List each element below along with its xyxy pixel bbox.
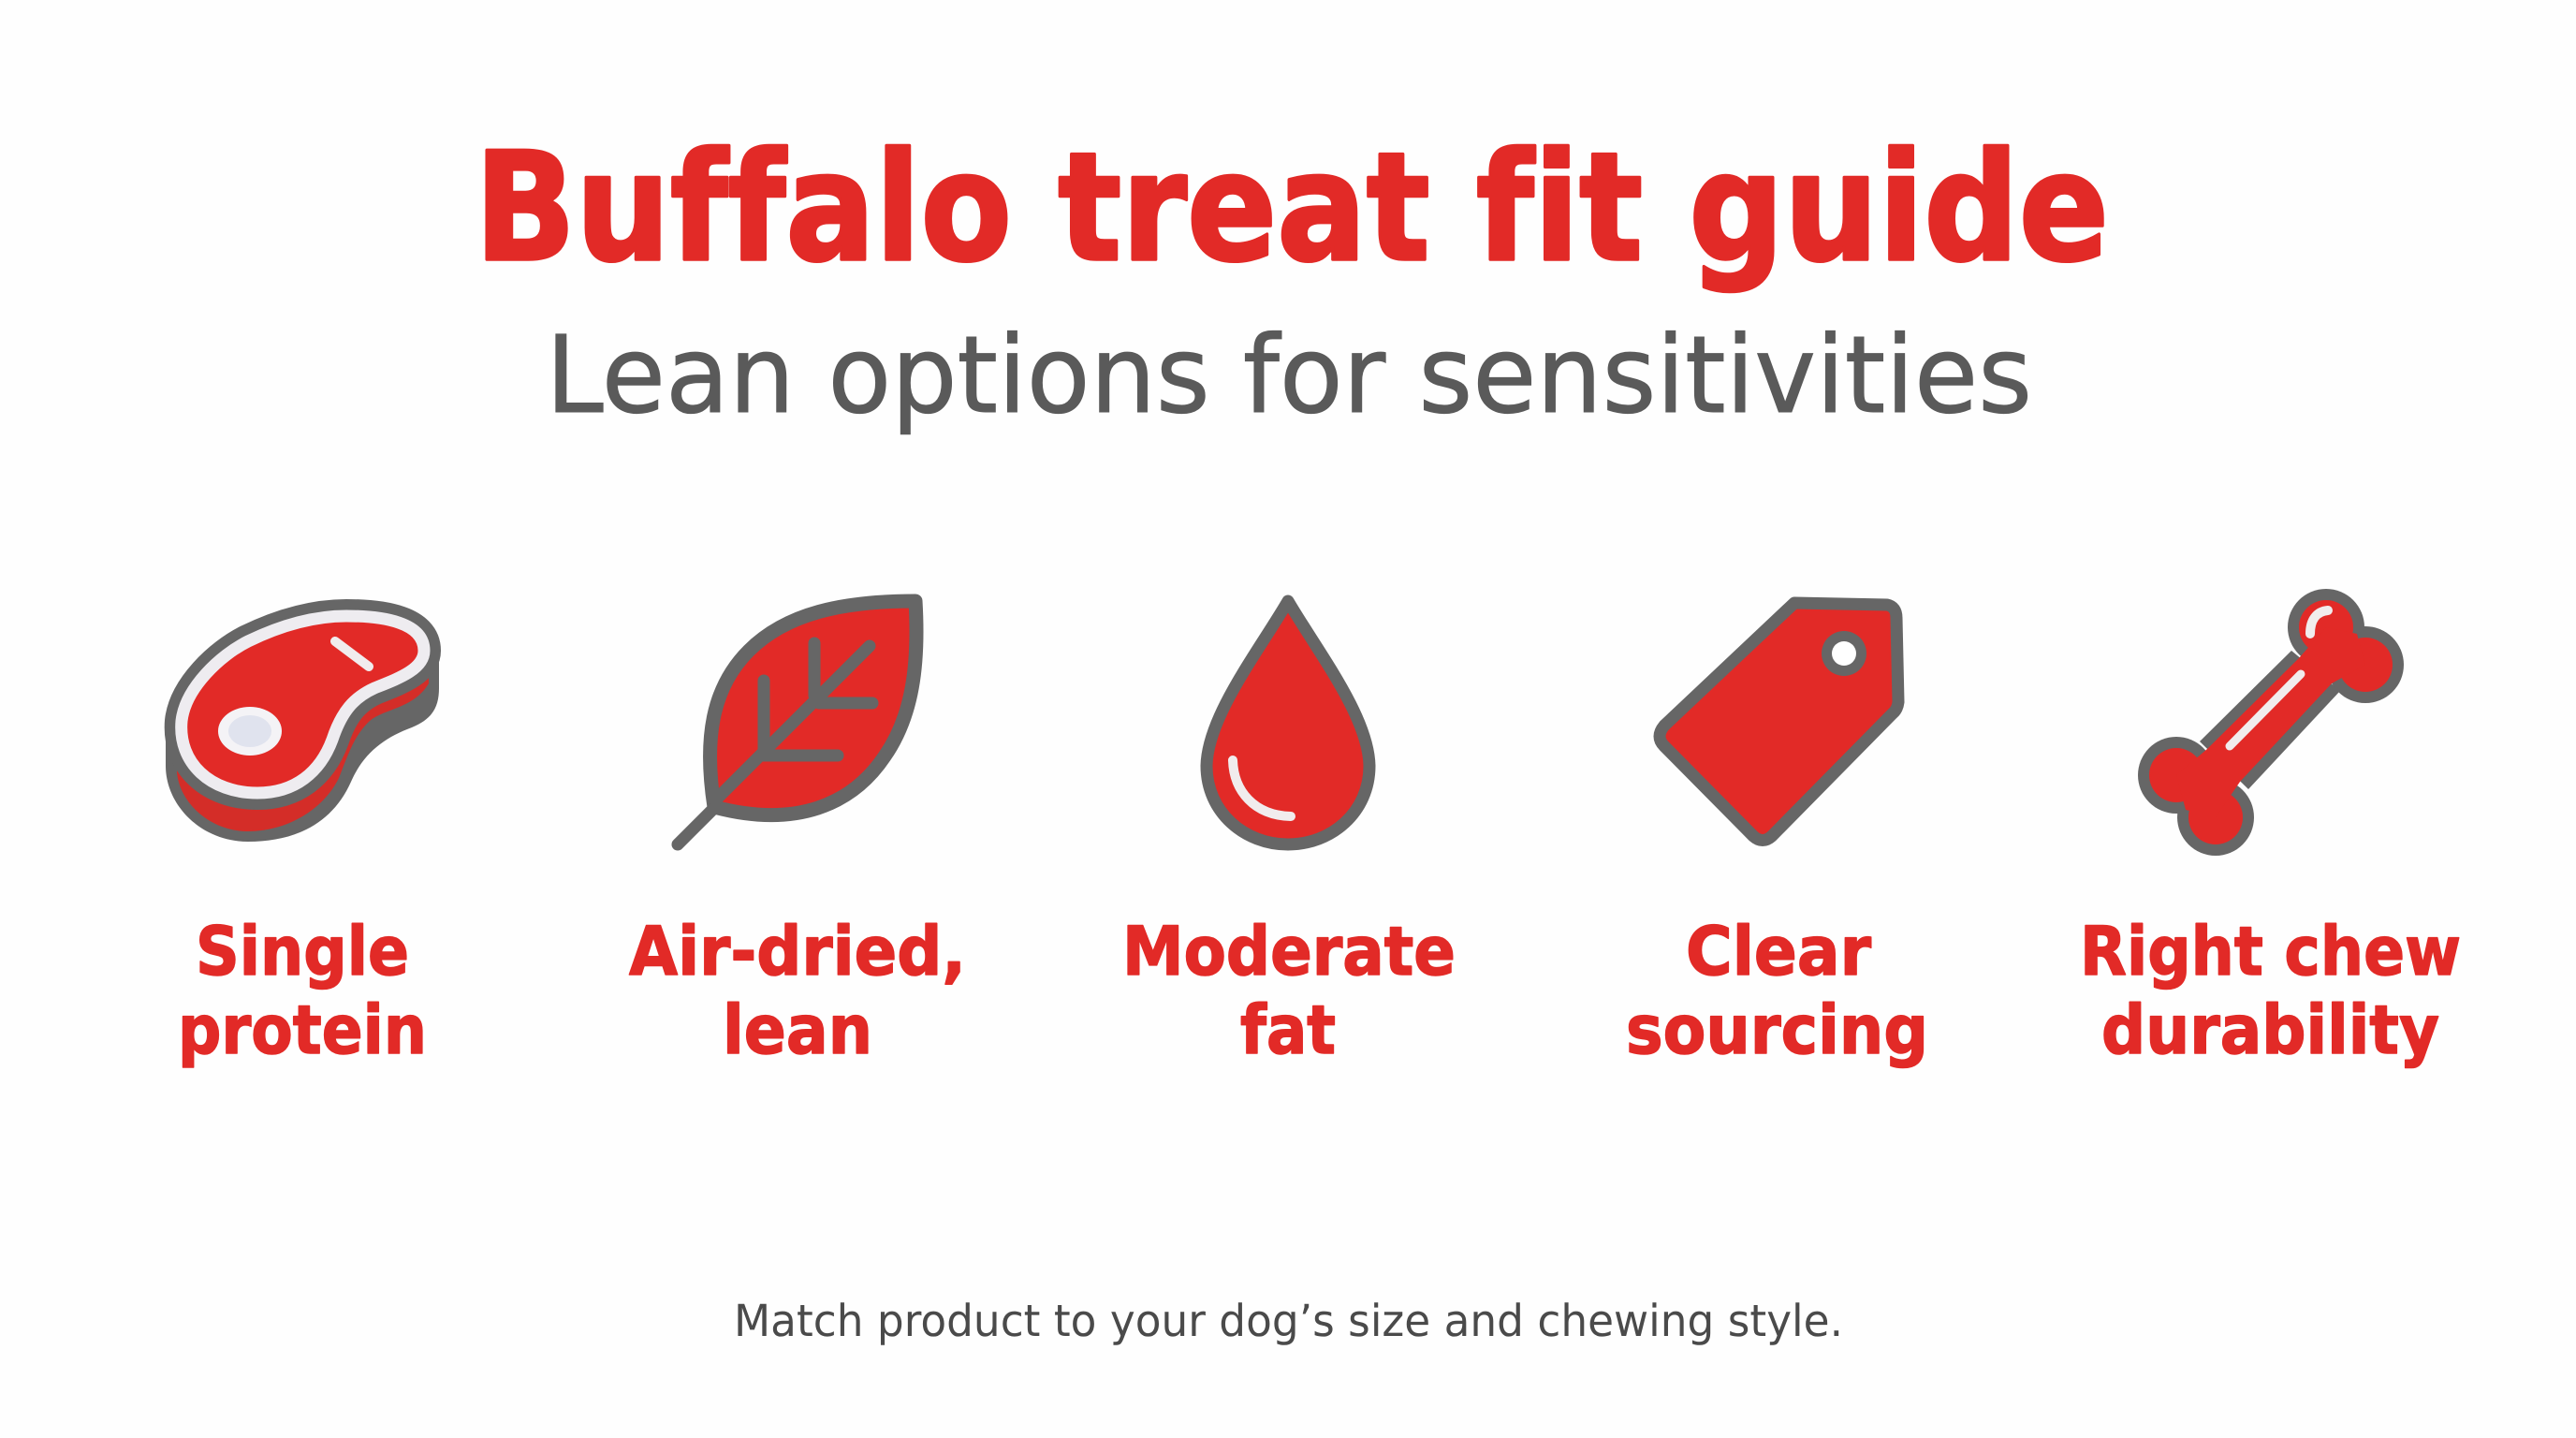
label: moderate fat: Moderate [1122,912,1456,990]
label: clear sourcing: sourcing [1626,990,1928,1069]
label: right chew durability: durability [2101,990,2439,1069]
icon: leaf [678,601,916,844]
label: clear sourcing: Clear [1686,912,1871,990]
label: moderate fat: fat [1240,990,1336,1069]
label: right chew durability [2080,912,2461,1069]
icon: price tag [1660,603,1898,841]
subtitle: Lean options for sensitivities [546,313,2032,437]
footer note: Match product to your dog’s size and chewing style. [734,1296,1843,1347]
label: single protein: Single [196,912,409,990]
icon: water drop [1207,601,1369,844]
label: clear sourcing [1626,912,1928,1069]
label: single protein [178,912,427,1069]
icon: bone [2138,589,2404,856]
label: right chew durability: Right chew [2080,912,2461,990]
label: air-dried, lean: Air-dried, [629,912,966,990]
label: single protein: protein [178,990,427,1069]
title: Buffalo treat fit guide [475,120,2109,295]
label: air-dried, lean: lean [723,990,872,1069]
label: moderate fat [1122,912,1456,1069]
label: air-dried, lean [629,912,966,1069]
icon: steak [166,616,439,842]
